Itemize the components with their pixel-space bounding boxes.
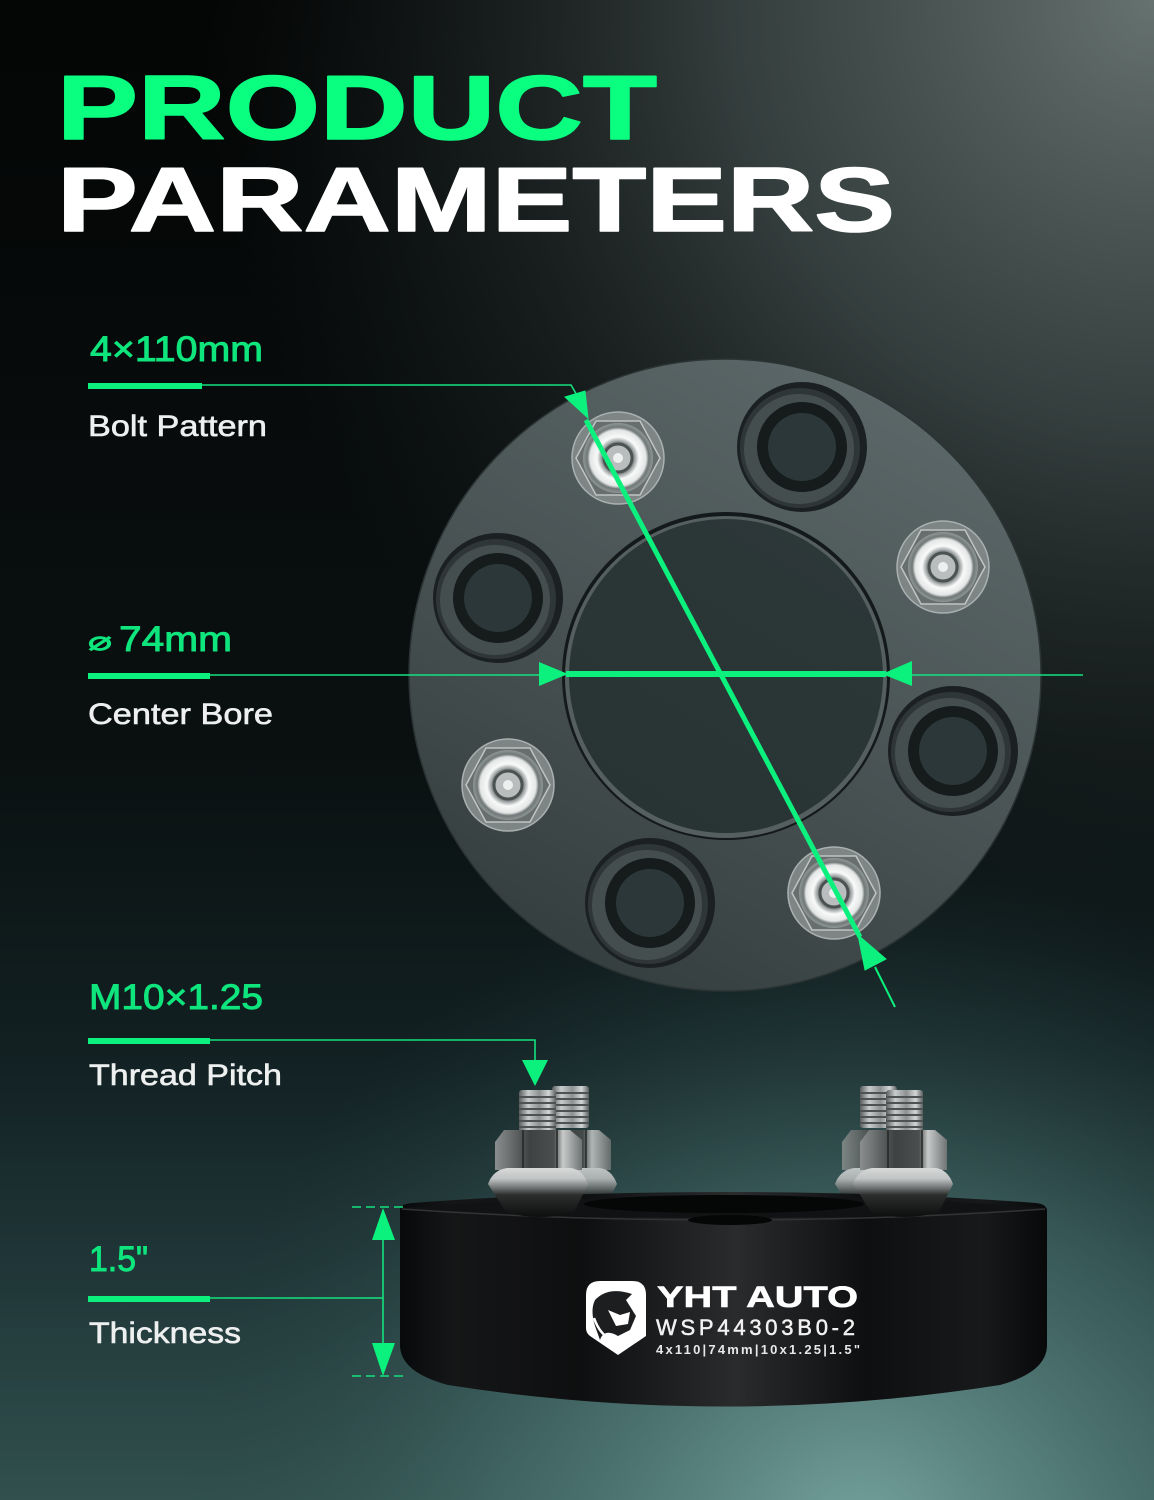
value: 74mm bbox=[119, 620, 232, 659]
leader line bbox=[88, 385, 578, 397]
value: M10×1.25 bbox=[89, 978, 263, 1017]
label: Center Bore bbox=[88, 698, 273, 731]
front studs and nuts bbox=[488, 1090, 953, 1217]
model number: WSP44303B0-2 bbox=[656, 1315, 855, 1340]
label: Bolt Pattern bbox=[88, 410, 267, 443]
brand name: YHT AUTO bbox=[657, 1281, 858, 1314]
measure arrow bbox=[539, 661, 912, 686]
value: 4×110mm bbox=[90, 330, 263, 369]
dimension: bolt pattern bbox=[88, 330, 895, 1007]
leader line bbox=[88, 674, 1083, 676]
dimension: thickness bbox=[88, 1207, 408, 1376]
rear studs and nuts bbox=[517, 1086, 935, 1217]
logo shield bbox=[586, 1281, 646, 1355]
wheel spacer top view bbox=[409, 359, 1041, 991]
spec line: 4x110|74mm|10x1.25|1.5" bbox=[656, 1342, 860, 1357]
dimension: thread pitch bbox=[88, 978, 548, 1092]
title bbox=[57, 58, 895, 251]
dimension: center bore bbox=[88, 620, 1083, 731]
title line: PRODUCT: PRODUCT bbox=[57, 58, 657, 159]
open bolt holes bbox=[433, 382, 1018, 968]
leader line bbox=[88, 1235, 383, 1350]
spacer disc bbox=[409, 359, 1041, 991]
center bore bbox=[562, 512, 890, 840]
value: 1.5" bbox=[89, 1240, 148, 1279]
label: Thread Pitch bbox=[89, 1059, 282, 1092]
extension lines bbox=[352, 1207, 408, 1376]
leader line bbox=[88, 1040, 535, 1062]
value: ⌀ bbox=[88, 626, 112, 656]
arrow bbox=[522, 1060, 548, 1086]
mounted nuts bbox=[462, 412, 989, 939]
title line: PARAMETERS: PARAMETERS bbox=[57, 150, 895, 251]
arrows bbox=[372, 1208, 395, 1376]
value bbox=[88, 620, 232, 659]
measure arrow bbox=[565, 391, 895, 1007]
spacer body bbox=[400, 1192, 1047, 1406]
spacer side view bbox=[400, 1086, 1047, 1406]
label: Thickness bbox=[89, 1317, 241, 1350]
